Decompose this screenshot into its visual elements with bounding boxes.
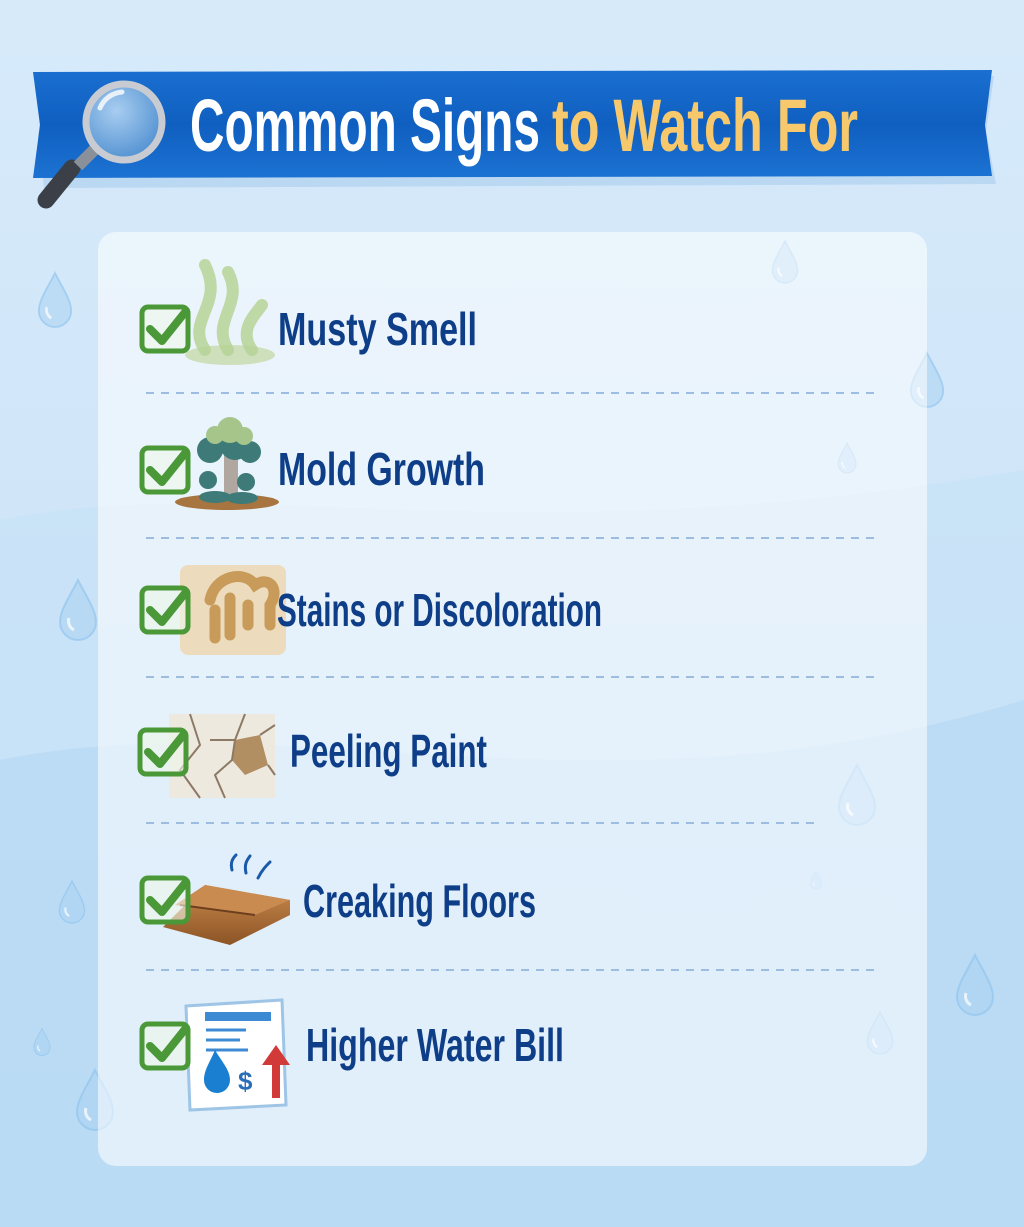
icon: magnifying glass [46, 84, 162, 200]
row: mold growth: Mold Growth [278, 443, 485, 495]
row: musty smell [142, 265, 477, 365]
panel: signs list [98, 232, 927, 1166]
banner [33, 70, 996, 200]
row: higher water bill: Higher Water Bill [306, 1019, 564, 1071]
row: higher water bill [142, 1000, 564, 1110]
row: mold growth [142, 417, 485, 510]
row: stains: Stains or Discoloration [277, 584, 602, 636]
row: higher water bill: $ [238, 1066, 253, 1096]
row: stains [142, 565, 602, 655]
row: musty smell: Musty Smell [278, 303, 477, 355]
row: peeling paint: Peeling Paint [290, 725, 487, 777]
water drops [34, 241, 993, 1130]
title: to Watch For [552, 84, 858, 167]
row: creaking floors [142, 855, 536, 945]
row: creaking floors: Creaking Floors [303, 875, 536, 927]
title: Common Signs [190, 84, 540, 167]
row: peeling paint [140, 714, 487, 798]
